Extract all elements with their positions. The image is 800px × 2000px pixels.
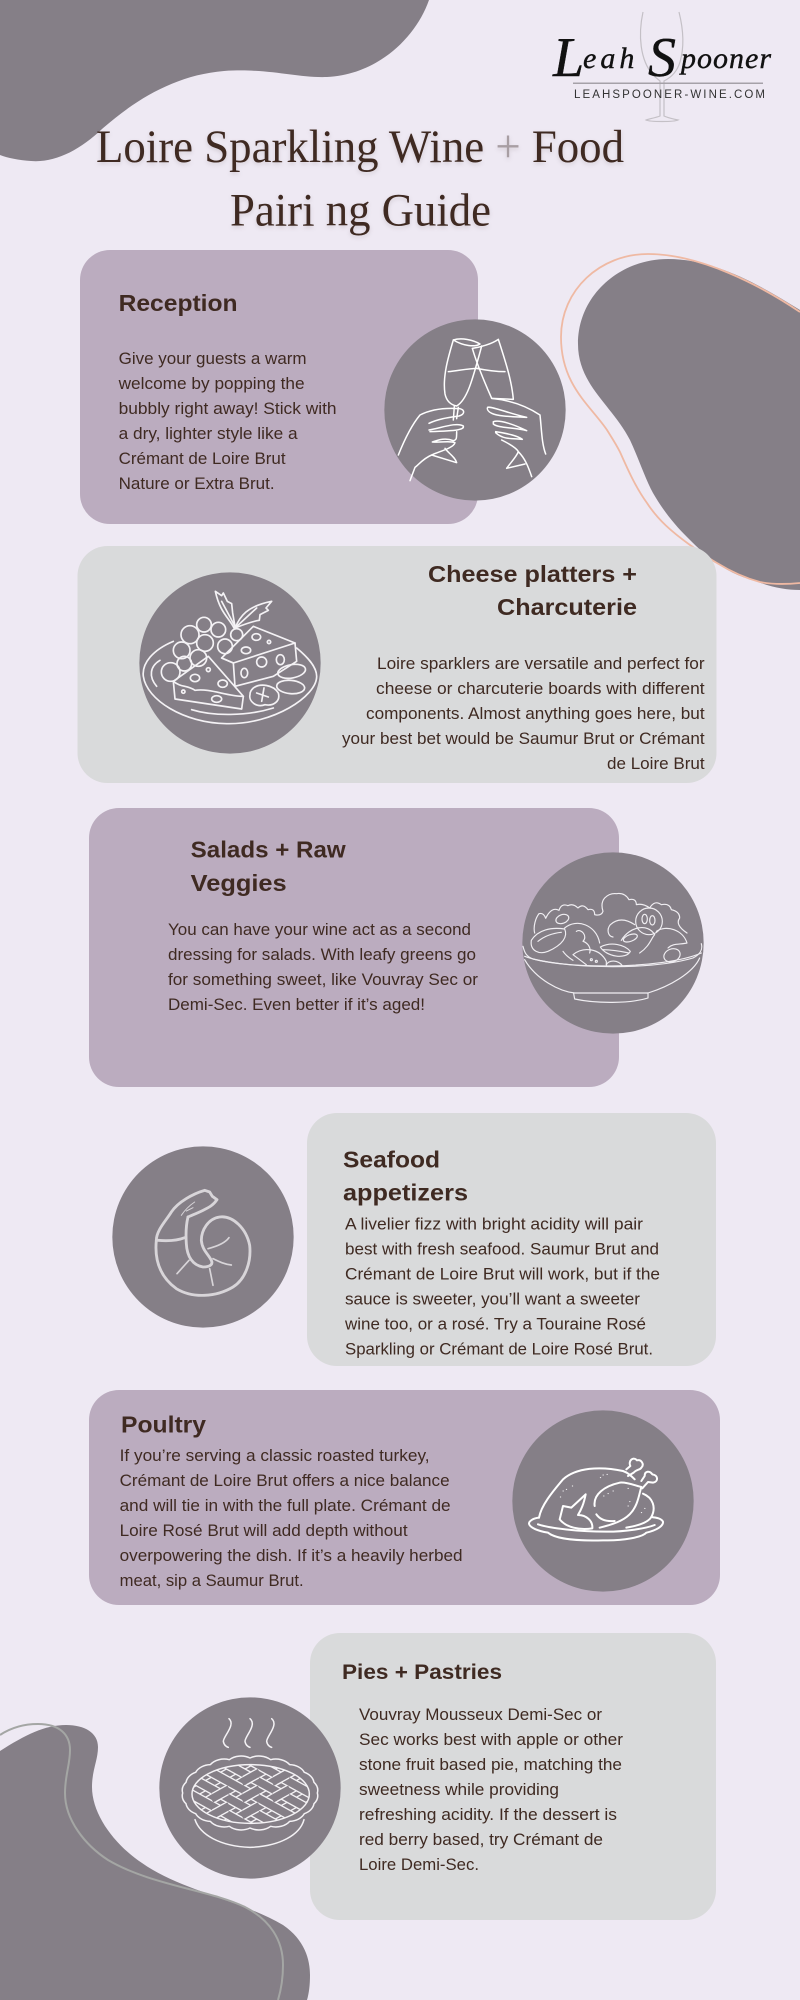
text block: reception: Reception (119, 290, 238, 316)
blob: top left (0, 0, 429, 161)
title: Pairi ng Guide (230, 184, 491, 236)
logo: Leah Spooner: eah (583, 42, 638, 75)
panel: reception card (80, 250, 478, 524)
panel: poultry card (89, 1390, 720, 1605)
text block: salads: dressing for salads. With leafy greens go (168, 946, 476, 964)
text block: cheese platters: your best bet would be Saumur Brut or Crémant (342, 730, 705, 748)
icon: cheese platter (139, 572, 321, 754)
text block: salads: Salads + Raw (191, 836, 346, 862)
icon: lattice pie (159, 1697, 341, 1879)
panel: pies card (310, 1633, 716, 1920)
text block: reception: Give your guests a warm (119, 350, 307, 368)
text block: cheese platters: Charcuterie (497, 594, 637, 620)
text block: reception: bubbly right away! Stick with (119, 400, 337, 418)
panel: cheese card (78, 546, 716, 783)
logo: Leah Spooner: L (552, 27, 584, 89)
text block: cheese platters: components. Almost anything goes here, but (366, 705, 705, 723)
text block: pies: Sec works best with apple or other (359, 1731, 624, 1749)
text block: poultry: Crémant de Loire Brut offers a nice balance (120, 1472, 450, 1490)
text block: seafood (343, 1146, 660, 1358)
text block: salads (168, 836, 479, 1014)
panel: salads card (89, 808, 619, 1087)
text block: cheese platters: cheese or charcuterie boards with different (376, 680, 705, 698)
title (96, 121, 624, 236)
text block: poultry: and will tie in with the full plate. Crémant de (120, 1497, 451, 1515)
text block: pies: refreshing acidity. If the dessert is (359, 1806, 617, 1824)
text block: pies: Vouvray Mousseux Demi-Sec or (359, 1706, 603, 1724)
text block: poultry: overpowering the dish. If it’s a heavily herbed (120, 1547, 463, 1565)
text block: pies: Loire Demi-Sec. (359, 1856, 479, 1874)
text block: reception: a dry, lighter style like a (119, 425, 298, 443)
text block: salads: You can have your wine act as a second (168, 921, 471, 939)
logo: Leah Spooner (552, 12, 772, 122)
text block: cheese platters: de Loire Brut (607, 755, 705, 773)
title: Loire Sparkling Wine + Food (96, 121, 624, 173)
logo: Leah Spooner: S (648, 27, 676, 89)
text block: pies (342, 1661, 624, 1874)
text block: pies: red berry based, try Crémant de (359, 1831, 603, 1849)
text block: poultry: Loire Rosé Brut will add depth without (120, 1522, 408, 1540)
text block: cheese platters: Cheese platters + (428, 561, 637, 587)
panel: seafood card (307, 1113, 716, 1366)
text block: poultry: meat, sip a Saumur Brut. (120, 1572, 304, 1590)
text block: pies: stone fruit based pie, matching the (359, 1756, 622, 1774)
logo: Leah Spooner: pooner (679, 42, 772, 75)
text block: seafood: Sparkling or Crémant de Loire Rosé Brut. (345, 1340, 653, 1358)
blob: bottom left with outline (0, 1724, 310, 2000)
text block: seafood: sauce is sweeter, you’ll want a sweeter (345, 1290, 641, 1308)
text block: seafood: wine too, or a rosé. Try a Touraine Rosé (344, 1316, 646, 1334)
icon: roast turkey (512, 1410, 694, 1592)
text block: seafood: A livelier fizz with bright acidity will pair (345, 1216, 644, 1234)
text block: seafood: Crémant de Loire Brut will work, but if the (345, 1266, 660, 1284)
text block: cheese platters (342, 561, 705, 773)
blob: right with peach outline (561, 254, 800, 590)
text block: poultry: Poultry (121, 1412, 206, 1438)
text block: pies: Pies + Pastries (342, 1661, 502, 1684)
logo: Leah Spooner: LEAHSPOONER-WINE.COM (574, 89, 765, 101)
text block: pies: sweetness while providing (359, 1781, 559, 1799)
text block: seafood: Seafood (343, 1146, 440, 1172)
icon: shrimp (112, 1146, 294, 1328)
text block: reception (118, 290, 337, 493)
text block: salads: Demi-Sec. Even better if it’s aged! (168, 996, 425, 1014)
text block: seafood: best with fresh seafood. Saumur Brut and (345, 1240, 659, 1258)
icon: clinking champagne glasses (384, 319, 566, 501)
icon: salad bowl (522, 852, 704, 1034)
text block: reception: welcome by popping the (118, 375, 305, 393)
text block: salads: Veggies (191, 870, 287, 896)
text block: poultry: If you’re serving a classic roasted turkey, (120, 1447, 430, 1465)
text block: reception: Crémant de Loire Brut (119, 450, 286, 468)
text block: poultry (120, 1412, 463, 1590)
text block: salads: for something sweet, like Vouvray Sec or (168, 971, 479, 989)
text block: cheese platters: Loire sparklers are versatile and perfect for (377, 655, 705, 673)
text block: seafood: appetizers (343, 1180, 468, 1206)
text block: reception: Nature or Extra Brut. (119, 475, 275, 493)
